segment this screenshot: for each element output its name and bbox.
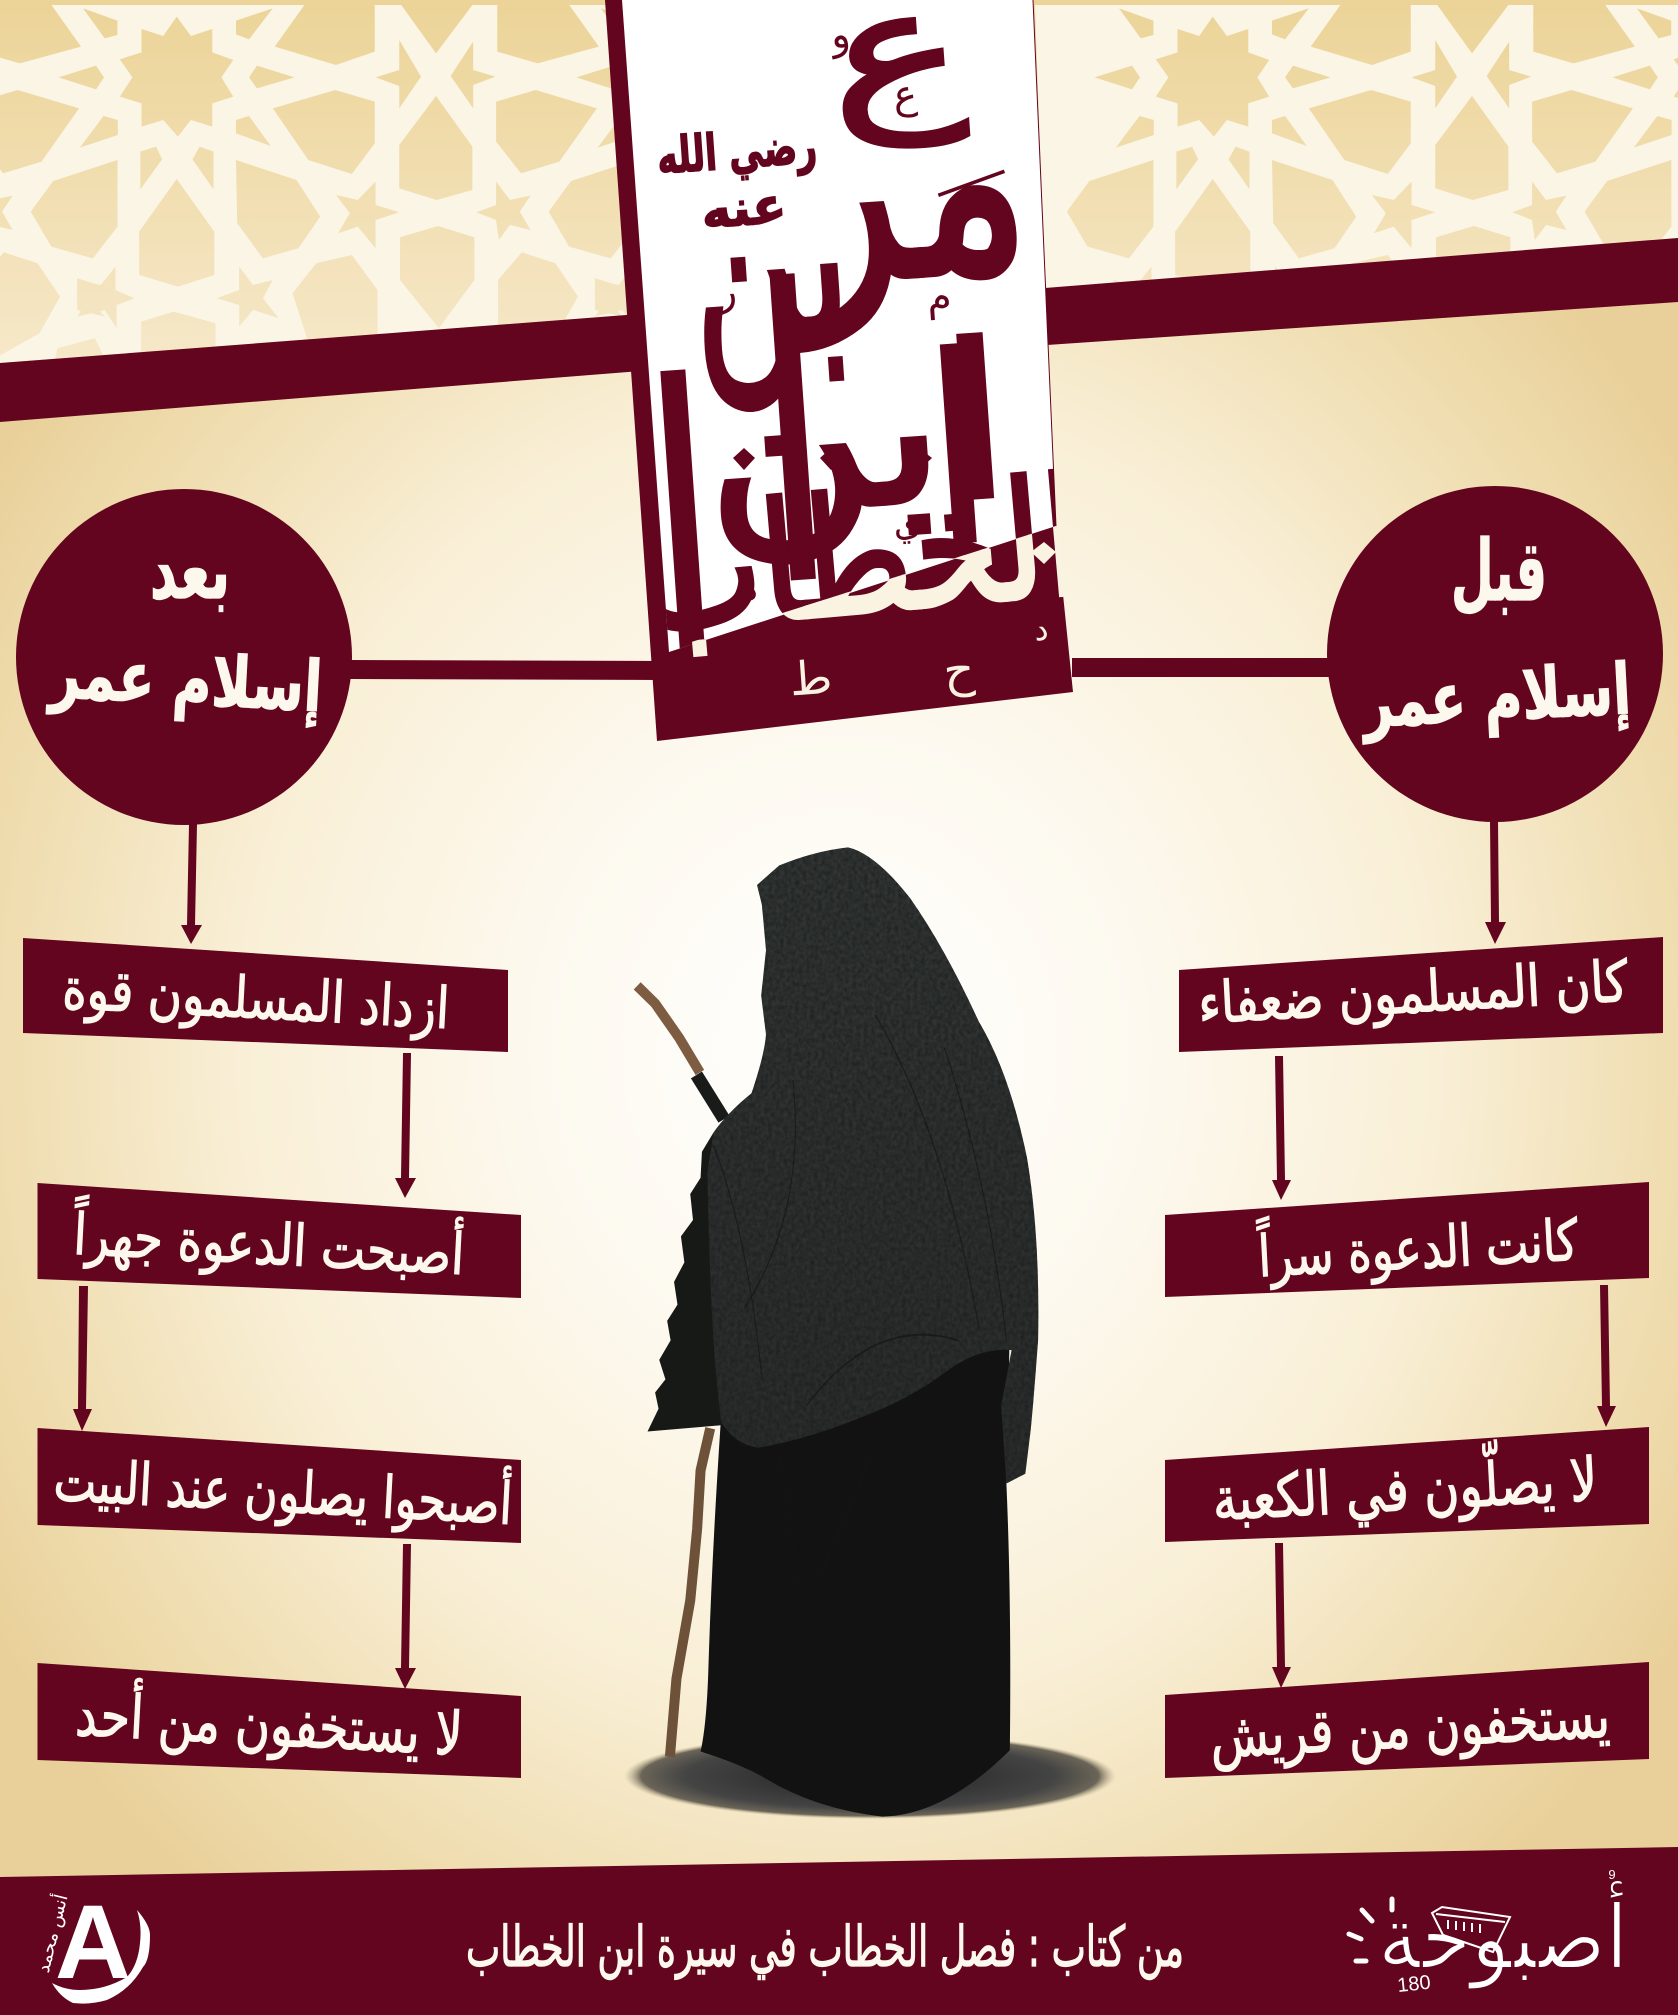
logo: left A mark: [31, 1884, 150, 2004]
calligraphy: light part of the name over the frame: ط: [788, 650, 834, 706]
left box 2: [38, 1183, 521, 1298]
calligraphy: dark part of the name: [660, 16, 1056, 648]
cloak folds: [714, 1015, 1006, 1594]
footer source text: من كتاب : فصل الخطاب في سيرة ابن الخطاب: [466, 1915, 1184, 1980]
right box 2: كانت الدعوة سراً: [1256, 1199, 1580, 1290]
cloak: [707, 847, 1038, 1484]
connector: right circle to card: [1072, 658, 1330, 677]
panel: right geometric pattern: [1035, 5, 1678, 288]
arrow: right 3 to 4: [1272, 1543, 1291, 1688]
shadow under figure: [624, 1733, 1116, 1819]
robe: [701, 1327, 1010, 1817]
inner dark sleeve: [648, 1132, 724, 1431]
calligraphy: light part of the name over the frame: [692, 526, 1064, 698]
circle: before Omar's conversion: [1327, 486, 1663, 822]
calligraphy: dark part of the name: ابن: [693, 297, 1017, 568]
logo: right Osbouha mark: أصبوحة: [1378, 1880, 1628, 1990]
panel: left geometric pattern: [0, 5, 640, 363]
logo number: 180: [1396, 1972, 1432, 1997]
right box 2: [1165, 1182, 1649, 1297]
card dark frame: [605, 0, 1073, 741]
calligraphy: dark part of the name: ا: [638, 313, 729, 732]
staff upper: [637, 986, 700, 1072]
card right edge line: [1033, 0, 1056, 526]
logo sun rays: [1349, 1899, 1392, 1961]
calligraphy: dark part of the name: بن: [679, 104, 859, 413]
footer band: [0, 1847, 1678, 2015]
calligraphy: dark part of the name: د: [747, 378, 763, 413]
arrow: left circle to first box: [181, 824, 202, 944]
left box 4: لا يستخفون من أحد: [74, 1675, 464, 1770]
calligraphy: dark part of the name: ـ: [926, 138, 1008, 206]
arrow: right 2 to 3: [1597, 1285, 1616, 1427]
calligraphy: light part of the name over the frame: ح: [941, 641, 976, 699]
circle: after Omar's conversion: إسلام عمر: [46, 632, 324, 729]
left box 1: [23, 938, 508, 1052]
left box 3: أصبحوا يصلون عند البيت: [52, 1442, 514, 1539]
logo mark above alef: 9: [1608, 1867, 1616, 1882]
calligraphy: dark part of the name: الخطاب: [625, 444, 1089, 670]
arrow: left 1 to 2: [395, 1053, 416, 1198]
calligraphy: dark part of the name: م: [925, 273, 953, 321]
card white panel: [622, 0, 1056, 652]
calligraphy: light part of the name over the frame: د: [1033, 610, 1050, 648]
calligraphy: dark part of the name: و: [824, 11, 853, 60]
arrow: right circle to first box: [1485, 821, 1506, 944]
calligraphy: dark part of the name: عنه: [699, 176, 788, 240]
calligraphy: dark part of the name: مر: [776, 15, 1038, 350]
arrow: right 1 to 2: [1272, 1056, 1291, 1200]
left box 2: أصبحت الدعوة جهراً: [72, 1193, 466, 1288]
calligraphy: dark part of the name: ا: [747, 211, 840, 669]
right diagonal band: [1045, 238, 1678, 345]
logo building icon: [1432, 1907, 1510, 1952]
figure: robed person with staff: [637, 847, 1038, 1817]
calligraphy: dark part of the name: د: [742, 570, 759, 608]
calligraphy: light part of the name over the frame: الخطاب: [625, 444, 1089, 670]
circle: after Omar's conversion: بعد: [150, 527, 230, 617]
calligraphy: dark part of the name: ي: [892, 502, 923, 545]
logo: left A mark: أنس محمد: [31, 1892, 73, 1975]
connector: left circle to card: [350, 660, 660, 680]
staff lower: [670, 1428, 710, 1757]
left diagonal band: [0, 314, 640, 422]
left box 3: [38, 1428, 521, 1543]
calligraphy: dark part of the name: رضي الله: [655, 117, 819, 186]
arrow: left 3 to 4: [395, 1544, 416, 1689]
circle: before Omar's conversion: قبل: [1451, 522, 1547, 620]
title card: Omar ibn al-Khattab calligraphy: [605, 0, 1089, 741]
calligraphy small marks: ع: [892, 71, 919, 119]
top background strip: [0, 0, 1678, 6]
calligraphy: dark part of the name: ر: [714, 268, 738, 316]
circle: after Omar's conversion: [16, 489, 352, 825]
calligraphy: dark part of the name: ا: [920, 303, 998, 603]
left box 1: ازداد المسلمون قوة: [61, 956, 451, 1042]
staff wrap: [696, 1075, 724, 1119]
logo: left A mark: A: [55, 1884, 131, 2001]
logo: right Osbouha mark: [1349, 1867, 1628, 1997]
arrow: left 2 to 3: [73, 1286, 92, 1431]
